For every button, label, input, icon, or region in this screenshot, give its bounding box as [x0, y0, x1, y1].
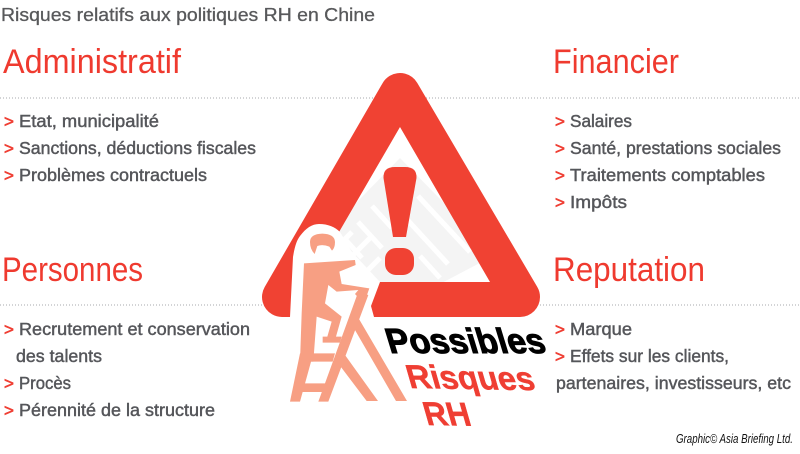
list: reputation items: partenaires, investisseurs, etc — [556, 373, 791, 393]
label: possibles risques rh — [380, 322, 550, 434]
list: personnes items: Procès — [19, 373, 71, 393]
figure: body — [300, 260, 369, 362]
list: financier items: Traitements comptables — [570, 165, 765, 185]
heading: administratif: Administratif — [3, 43, 182, 81]
list: administratif items: Etat, municipalité — [19, 111, 159, 131]
panel: administratif — [3, 43, 256, 185]
title: Risques relatifs aux politiques RH en Chine — [1, 4, 375, 25]
list: financier items: > — [555, 139, 565, 158]
list: personnes items: des talents — [16, 346, 102, 366]
heading: personnes: Personnes — [2, 251, 143, 289]
list: financier items: > — [555, 112, 565, 131]
figure: hair — [310, 234, 335, 254]
icon: warning triangle — [282, 93, 520, 305]
label: possibles risques rh: Possibles — [380, 322, 550, 361]
list: financier items: Santé, prestations sociales — [570, 138, 781, 158]
heading: financier: Financier — [553, 43, 679, 81]
icon: exclamation mark — [383, 167, 417, 275]
icon: person climbing ladder — [290, 224, 407, 402]
label: possibles risques rh: RH — [419, 396, 475, 434]
list: personnes items: Pérennité de la structure — [19, 400, 215, 420]
list: reputation items: > — [555, 320, 565, 339]
list: administratif items: Problèmes contractuels — [19, 165, 207, 185]
panel: reputation — [553, 251, 791, 393]
list: personnes items: > — [4, 401, 14, 420]
list: financier items: Salaires — [570, 111, 632, 131]
list: reputation items: Effets sur les clients, — [570, 346, 729, 366]
list: administratif items: Sanctions, déductions fiscales — [19, 138, 256, 158]
list: reputation items: Marque — [570, 319, 632, 339]
label: possibles risques rh: Risques — [402, 359, 539, 398]
list: personnes items: Recrutement et conservation — [19, 319, 250, 339]
list: administratif items: > — [4, 139, 14, 158]
list: administratif items — [4, 111, 256, 185]
list: reputation items: > — [555, 347, 565, 366]
ladder — [290, 292, 407, 402]
list: personnes items — [4, 319, 250, 420]
list: financier items: > — [555, 193, 565, 212]
list: reputation items — [555, 319, 791, 393]
list: financier items — [555, 111, 781, 212]
list: administratif items: > — [4, 112, 14, 131]
list: personnes items: > — [4, 320, 14, 339]
list: financier items: Impôts — [570, 192, 627, 212]
list: personnes items: > — [4, 374, 14, 393]
list: financier items: > — [555, 166, 565, 185]
list: administratif items: > — [4, 166, 14, 185]
panel: personnes — [2, 251, 250, 420]
panel: financier — [553, 43, 781, 212]
watermark: labyrinth pattern — [340, 158, 479, 282]
heading: reputation: Reputation — [553, 251, 705, 289]
